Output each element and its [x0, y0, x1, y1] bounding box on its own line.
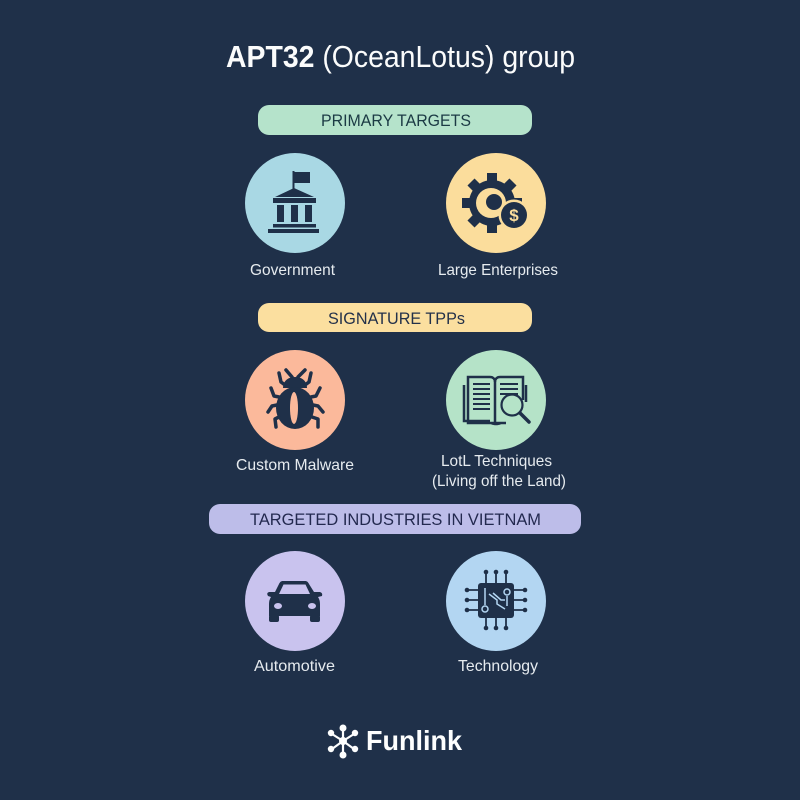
label: automotive: Automotive: [254, 658, 335, 675]
logo: Funlink: [328, 724, 462, 758]
heading: primary targets: [258, 105, 532, 135]
wordmark: Funlink: [366, 725, 462, 756]
icon: bug: [245, 350, 345, 450]
label: large enterprises: Large Enterprises: [438, 262, 558, 279]
icon: open book with magnifier: [446, 350, 546, 450]
label: LotL techniques: LotL Techniques: [441, 453, 552, 470]
panel: targeted industries: [209, 504, 581, 675]
icon: gear with dollar: [446, 153, 546, 253]
label: LotL techniques: (Living off the Land): [432, 473, 566, 490]
title: APT32 (OceanLotus) group: [226, 39, 575, 74]
label: LotL techniques: [432, 453, 566, 490]
heading: targeted industries in Vietnam: TARGETED INDUSTRIES IN VIETNAM: [250, 510, 541, 529]
heading: primary targets: PRIMARY TARGETS: [321, 111, 471, 130]
panel: signature TTPs: [236, 303, 566, 490]
icon: gear with dollar: $: [509, 206, 519, 225]
label: custom malware: Custom Malware: [236, 457, 354, 474]
label: government: Government: [250, 262, 336, 279]
icon: circuit chip: [446, 551, 546, 651]
heading: targeted industries in Vietnam: [209, 504, 581, 534]
heading: signature TPPs: SIGNATURE TPPs: [328, 309, 465, 328]
label: technology: Technology: [458, 658, 538, 675]
icon: car: [245, 551, 345, 651]
icon: government building: [245, 153, 345, 253]
panel: primary targets: [245, 105, 558, 279]
heading: signature TPPs: [258, 303, 532, 332]
icon: Funlink network mark: [328, 724, 358, 758]
